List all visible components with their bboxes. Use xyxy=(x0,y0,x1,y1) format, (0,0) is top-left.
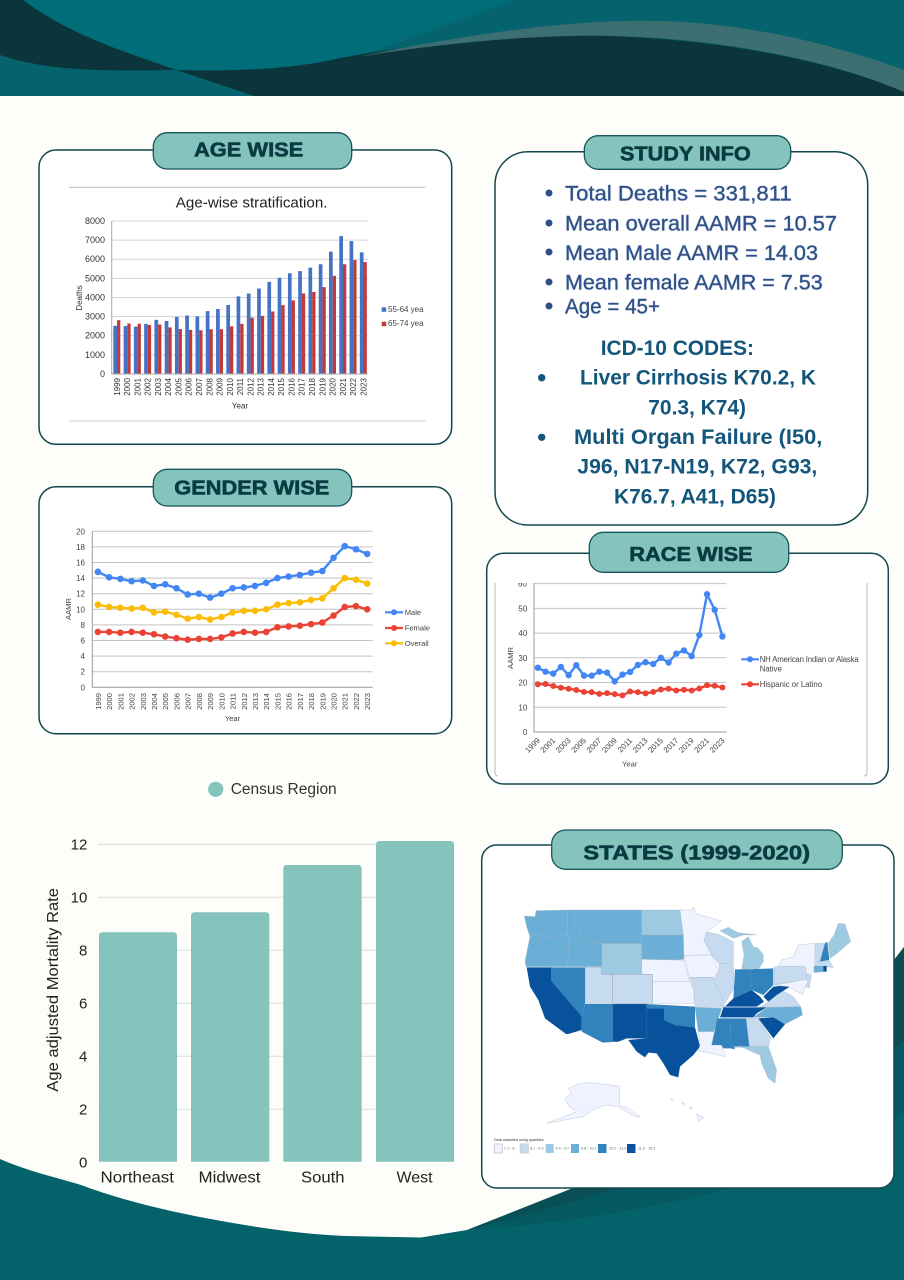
legend: age groups: 65-74 yea xyxy=(388,319,424,328)
bar chart: deaths by age group: 2021 xyxy=(339,377,348,396)
bar chart: deaths by age group: 2001 xyxy=(133,377,142,396)
bar chart: census region mortality xyxy=(45,836,454,1187)
bar chart: census region mortality: South xyxy=(301,1170,344,1187)
line chart: AAMR by gender: 2001 xyxy=(116,693,125,710)
legend: age groups xyxy=(382,305,424,328)
bar chart: deaths by age group: 2022 xyxy=(349,377,358,396)
line chart: AAMR by gender: 2013 xyxy=(251,693,260,710)
bar chart: deaths by age group: 2002 xyxy=(144,377,153,396)
bar chart: deaths by age group: Deaths xyxy=(75,285,84,311)
bar chart: deaths by age group: 0 xyxy=(100,369,105,379)
line chart: AAMR by gender: 2008 xyxy=(195,693,204,710)
line chart: AAMR by race: 30 xyxy=(518,654,528,663)
heading: race wise: RACE WISE xyxy=(629,544,753,566)
legend: map quantiles: 9.4 - 9.7 xyxy=(556,1146,569,1150)
line chart: AAMR by race: 2011 xyxy=(616,736,634,754)
bar chart: deaths by age group: 8000 xyxy=(85,216,105,226)
bar chart: deaths by age group: 2015 xyxy=(277,377,286,396)
bar chart: deaths by age group: 2012 xyxy=(246,377,255,396)
panel: states xyxy=(482,830,894,1188)
line chart: AAMR by gender: Year xyxy=(225,714,241,723)
line chart: AAMR by gender: 0 xyxy=(81,683,86,692)
list: ICD-10 codes: 70.3, K74) xyxy=(648,395,746,419)
legend: map quantiles: 7.1 - 8 xyxy=(504,1146,514,1150)
line chart: AAMR by race: 2005 xyxy=(569,736,588,755)
list: ICD-10 codes xyxy=(538,336,822,508)
legend: gender xyxy=(385,608,430,648)
line chart: AAMR by race: 2023 xyxy=(708,736,727,755)
legend: gender: Female xyxy=(405,624,430,633)
bar chart: deaths by age group: 2004 xyxy=(164,377,173,396)
bar chart: census region mortality: 0 xyxy=(79,1154,87,1172)
legend: gender: Male xyxy=(405,608,421,617)
map: US states choropleth xyxy=(524,907,851,1123)
bar chart: census region mortality: 2 xyxy=(79,1101,87,1118)
bar chart: census region mortality: West xyxy=(396,1170,433,1187)
line chart: AAMR by gender: 10 xyxy=(76,605,86,614)
line chart: AAMR by gender: 16 xyxy=(76,558,86,568)
line chart: AAMR by gender: 2 xyxy=(81,668,86,677)
line chart: AAMR by race: 2015 xyxy=(646,736,665,755)
bar chart: census region mortality: Age adjusted Mortality Rate xyxy=(45,888,62,1092)
bar chart: deaths by age group: 2017 xyxy=(298,377,307,396)
heading: gender wise xyxy=(153,469,352,506)
bar chart: deaths by age group: 2005 xyxy=(174,377,184,396)
bar chart: deaths by age group: 2000 xyxy=(85,331,105,341)
list: study statistics: Mean female AAMR = 7.53 xyxy=(565,270,823,294)
heading: age wise: AGE WISE xyxy=(194,140,303,162)
bar chart: deaths by age group: 2000 xyxy=(123,377,132,396)
legend: race: Native xyxy=(760,665,782,674)
panel: gender wise xyxy=(39,469,452,734)
list: study statistics: Mean Male AAMR = 14.03 xyxy=(565,241,818,265)
bar chart: deaths by age group: 2014 xyxy=(267,377,276,396)
line chart: AAMR by gender: 2004 xyxy=(150,693,159,710)
bar chart: deaths by age group xyxy=(75,216,368,411)
chart title: Age-wise stratification. xyxy=(176,195,328,212)
bar chart: deaths by age group: 2023 xyxy=(359,377,368,396)
line chart: AAMR by gender: 2023 xyxy=(363,693,372,710)
list: ICD-10 codes: J96, N17-N19, K72, G93, xyxy=(577,454,817,478)
bar chart: census region mortality: 8 xyxy=(79,942,87,959)
line chart: AAMR by gender: 20 xyxy=(76,527,86,536)
bar chart: deaths by age group: 6000 xyxy=(85,254,105,264)
line chart: AAMR by gender: 2021 xyxy=(341,693,350,710)
line chart: AAMR by race: Year xyxy=(622,760,638,769)
line chart: AAMR by race: AAMR xyxy=(506,647,515,669)
list: ICD-10 codes: Liver Cirrhosis K70.2, K xyxy=(580,365,816,389)
line chart: AAMR by gender: 2015 xyxy=(273,693,282,710)
list: study statistics xyxy=(546,182,837,318)
bar chart: census region mortality: Northeast xyxy=(100,1170,175,1187)
heading: gender wise: GENDER WISE xyxy=(174,477,329,499)
bar chart: deaths by age group: 3000 xyxy=(85,312,105,322)
line chart: AAMR by race: 2001 xyxy=(539,736,557,755)
list: ICD-10 codes: ICD-10 CODES: xyxy=(601,336,754,360)
bar chart: deaths by age group: 2010 xyxy=(226,377,235,396)
heading: age wise xyxy=(153,133,352,169)
line chart: AAMR by gender: 2019 xyxy=(318,693,327,710)
legend: race xyxy=(741,655,859,689)
line chart: AAMR by race: 10 xyxy=(518,703,528,712)
line chart: AAMR by race: 2013 xyxy=(631,736,650,755)
line chart: AAMR by gender: 2007 xyxy=(184,693,193,710)
line chart: AAMR by gender: 2010 xyxy=(217,693,226,710)
line chart: AAMR by race: 2009 xyxy=(600,736,619,755)
panel: age wise xyxy=(39,133,452,444)
heading: race wise xyxy=(589,532,789,572)
legend: age groups: 55-64 yea xyxy=(388,305,424,314)
bar chart: deaths by age group: 1000 xyxy=(85,350,105,360)
line chart: AAMR by gender: 2009 xyxy=(206,693,215,710)
legend: race: NH American Indian or Alaska xyxy=(760,655,859,664)
legend: map quantiles: 11.6 - 15.3 xyxy=(638,1146,655,1150)
line chart: AAMR by gender: 14 xyxy=(76,574,86,583)
footer wave xyxy=(0,947,904,1280)
line chart: AAMR by gender: 2012 xyxy=(240,693,249,710)
heading: study info: STUDY INFO xyxy=(620,144,751,166)
line chart: AAMR by gender: 2017 xyxy=(296,693,305,710)
line chart: AAMR by race: 60 xyxy=(518,580,527,589)
bar chart: deaths by age group: 5000 xyxy=(85,273,105,283)
line chart: AAMR by race: 0 xyxy=(523,728,528,737)
line chart: AAMR by gender: 2016 xyxy=(285,693,294,710)
header banner xyxy=(0,0,904,96)
line chart: AAMR by race: 2021 xyxy=(692,736,711,755)
line chart: AAMR by gender: 2018 xyxy=(307,693,316,710)
bar chart: deaths by age group: 2009 xyxy=(216,377,225,396)
line chart: AAMR by gender: 18 xyxy=(76,543,86,552)
line chart: AAMR by gender: 4 xyxy=(81,652,86,661)
panel: study info xyxy=(495,136,868,525)
legend: census region: Census Region xyxy=(231,781,337,798)
list: study statistics: Mean overall AAMR = 10.57 xyxy=(565,212,837,236)
bar chart: deaths by age group: 2020 xyxy=(328,377,338,396)
bar chart: deaths by age group: 2018 xyxy=(308,377,317,396)
bar chart: census region mortality: 10 xyxy=(71,889,87,906)
line chart: AAMR by race xyxy=(506,580,727,769)
list: ICD-10 codes: K76.7, A41, D65) xyxy=(614,484,776,508)
bar chart: deaths by age group: 2008 xyxy=(205,377,214,396)
line chart: AAMR by gender: 2005 xyxy=(161,693,170,710)
bar chart: census region mortality: 12 xyxy=(71,836,87,853)
bar chart: deaths by age group: Year xyxy=(232,402,248,411)
legend: race: Hispanic or Latino xyxy=(760,680,823,689)
line chart: AAMR by race: 1999 xyxy=(523,736,542,755)
line chart: AAMR by gender: 2020 xyxy=(330,693,338,710)
legend: gender: Overall xyxy=(405,639,429,648)
legend: map quantiles: 9.8 - 10.1 xyxy=(581,1146,597,1150)
line chart: AAMR by race: 2007 xyxy=(585,736,603,755)
heading: states xyxy=(552,830,842,869)
bar chart: deaths by age group: 2007 xyxy=(195,377,204,396)
line chart: AAMR by race: 40 xyxy=(518,629,528,638)
line chart: AAMR by race: 20 xyxy=(518,678,528,688)
legend: map quantiles xyxy=(494,1138,655,1153)
panel: race wise xyxy=(487,532,888,784)
line chart: AAMR by gender: 6 xyxy=(81,636,86,646)
bar chart: deaths by age group: 2011 xyxy=(236,377,245,395)
line chart: AAMR by race: 2019 xyxy=(677,736,696,755)
line chart: AAMR by gender: 2022 xyxy=(352,693,361,710)
line chart: AAMR by race: 50 xyxy=(518,604,528,613)
bar chart: deaths by age group: 2003 xyxy=(154,377,163,396)
line chart: AAMR by gender: 2006 xyxy=(172,693,181,710)
line chart: AAMR by race: 2003 xyxy=(554,736,573,755)
bar chart: deaths by age group: 7000 xyxy=(85,235,105,245)
bar chart: deaths by age group: 2006 xyxy=(185,377,194,396)
bar chart: deaths by age group: 2016 xyxy=(288,377,296,396)
bar chart: deaths by age group: 1999 xyxy=(113,377,122,396)
line chart: AAMR by gender: 2000 xyxy=(105,693,114,710)
line chart: AAMR by gender: 2014 xyxy=(262,693,271,710)
line chart: AAMR by gender: 2011 xyxy=(228,693,238,709)
line chart: AAMR by gender: 8 xyxy=(81,621,86,630)
bar chart: census region mortality: Midwest xyxy=(198,1170,261,1187)
legend: map quantiles: 8.1 - 9.3 xyxy=(530,1146,544,1150)
bar chart: census region mortality: 6 xyxy=(79,995,87,1012)
line chart: AAMR by gender: 2002 xyxy=(128,693,137,710)
list: ICD-10 codes: Multi Organ Failure (I50, xyxy=(574,425,822,449)
heading: study info xyxy=(584,136,791,169)
bar chart: deaths by age group: 4000 xyxy=(85,292,105,302)
heading: states: STATES (1999-2020) xyxy=(583,842,810,864)
list: study statistics: Age = 45+ xyxy=(565,294,660,318)
line chart: AAMR by gender: 1999 xyxy=(94,693,103,710)
line chart: AAMR by race: 2017 xyxy=(662,736,680,755)
legend: map quantiles: Data classified using quantiles xyxy=(494,1138,544,1142)
line chart: AAMR by gender xyxy=(64,527,373,723)
bar chart: census region mortality: 4 xyxy=(79,1048,87,1065)
bar chart: deaths by age group: 2019 xyxy=(318,377,327,396)
bar chart: deaths by age group: 2013 xyxy=(257,377,266,396)
list: study statistics: Total Deaths = 331,811 xyxy=(565,182,792,206)
line chart: AAMR by gender: AAMR xyxy=(64,598,73,620)
legend: map quantiles: 10.2 - 11.3 xyxy=(609,1146,626,1150)
line chart: AAMR by gender: 12 xyxy=(76,590,86,599)
line chart: AAMR by gender: 2003 xyxy=(139,693,148,710)
